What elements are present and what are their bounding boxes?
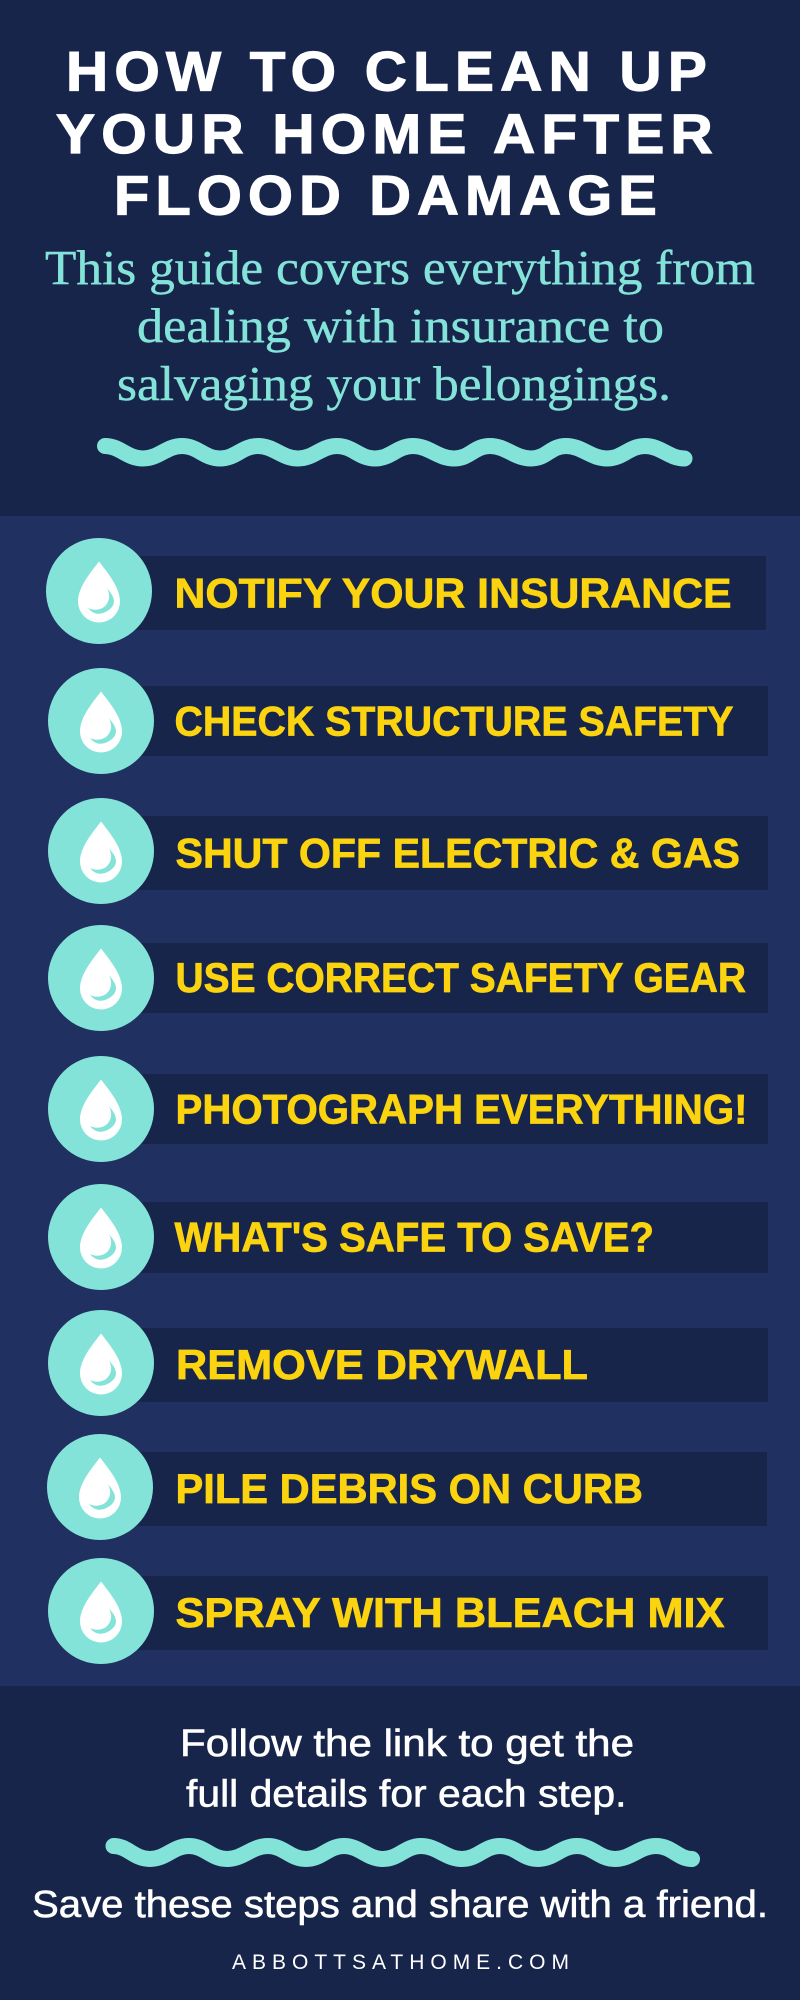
subtitle	[45, 240, 755, 411]
icon: water drop	[79, 1458, 121, 1518]
step 6: what's safe to save	[48, 1184, 768, 1290]
step 1: notify your insurance: NOTIFY YOUR INSURANCE	[174, 570, 732, 617]
step 8: pile debris on curb: PILE DEBRIS ON CURB	[176, 1465, 643, 1512]
step 5: photograph everything	[48, 1056, 768, 1162]
title: YOUR HOME AFTER	[56, 102, 719, 165]
panel: footer	[0, 1686, 800, 2000]
subtitle: salvaging your belongings.	[117, 356, 671, 411]
step 4: use correct safety gear: USE CORRECT SAFETY GEAR	[176, 954, 746, 1001]
step 7: remove drywall	[48, 1310, 768, 1416]
icon: water drop	[80, 948, 122, 1010]
step 4: use correct safety gear	[48, 925, 768, 1031]
step 9: spray with bleach mix: SPRAY WITH BLEACH MIX	[176, 1589, 724, 1636]
subtitle: This guide covers everything from	[45, 240, 755, 295]
title	[56, 40, 719, 226]
subtitle: dealing with insurance to	[137, 298, 664, 353]
icon: water drop	[80, 692, 122, 752]
icon: water drop	[80, 1334, 122, 1394]
step 2: check structure safety: CHECK STRUCTURE SAFETY	[174, 698, 734, 745]
icon: water drop	[80, 1208, 122, 1268]
wavy divider: footer	[114, 1846, 692, 1859]
call to action text: Follow the link to get the	[180, 1723, 634, 1765]
step 8: pile debris on curb	[47, 1434, 767, 1540]
share text: Save these steps and share with a friend.	[32, 1884, 768, 1926]
panel: steps	[0, 516, 800, 1686]
step 3: shut off electric and gas	[48, 798, 768, 904]
icon: water drop	[78, 562, 120, 622]
call to action text	[180, 1723, 634, 1816]
icon: water drop	[80, 1582, 122, 1642]
step 6: what's safe to save: WHAT'S SAFE TO SAVE?	[174, 1214, 654, 1261]
icon: water drop	[80, 822, 122, 882]
panel: header	[0, 0, 800, 516]
wavy divider: header	[105, 446, 684, 458]
step 3: shut off electric and gas: SHUT OFF ELECTRIC & GAS	[176, 830, 740, 877]
step 1: notify your insurance	[46, 538, 766, 644]
call to action text: full details for each step.	[186, 1774, 626, 1816]
title: FLOOD DAMAGE	[114, 164, 663, 226]
step 5: photograph everything: PHOTOGRAPH EVERYTHING!	[176, 1085, 748, 1132]
icon: water drop	[80, 1080, 122, 1140]
title: HOW TO CLEAN UP	[66, 40, 713, 102]
website: ABBOTTSATHOME.COM	[232, 1951, 569, 1974]
step 2: check structure safety	[48, 668, 768, 774]
step 7: remove drywall: REMOVE DRYWALL	[176, 1341, 588, 1388]
step 9: spray with bleach mix	[48, 1558, 768, 1664]
